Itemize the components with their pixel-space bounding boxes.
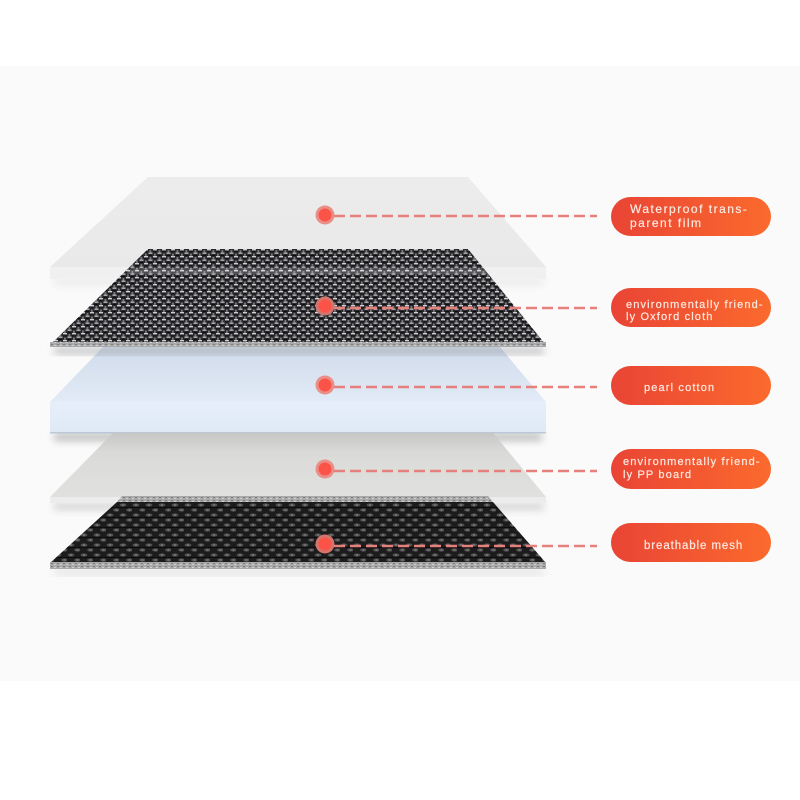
- label: Oxford cloth: [611, 288, 771, 327]
- label: breathable mesh: [611, 523, 771, 562]
- label: pearl cotton: [611, 366, 771, 405]
- background band: [0, 66, 800, 681]
- label: Oxford cloth: environmentally friend-: [626, 299, 764, 311]
- layer: breathable mesh: [50, 496, 546, 575]
- label: PP board: environmentally friend-: [623, 456, 761, 468]
- connector: breathable mesh: [316, 534, 597, 554]
- label: PP board: ly PP board: [623, 469, 692, 481]
- label: waterproof transparent film: Waterproof trans-: [630, 202, 748, 216]
- connector: waterproof film: [316, 206, 597, 224]
- label: breathable mesh: breathable mesh: [644, 540, 743, 552]
- layer: environmentally friendly Oxford cloth: [50, 249, 546, 354]
- label: waterproof transparent film: [611, 197, 771, 236]
- layer: pearl cotton: [50, 347, 546, 441]
- layer: waterproof transparent film: [50, 177, 546, 285]
- label: waterproof transparent film: parent film: [630, 216, 703, 230]
- connector: pearl cotton: [316, 376, 597, 394]
- label: Oxford cloth: ly Oxford cloth: [626, 311, 714, 323]
- label: PP board: [611, 449, 771, 489]
- connector: PP board: [316, 460, 597, 478]
- label: pearl cotton: pearl cotton: [644, 382, 715, 394]
- layer: environmentally friendly PP board: [50, 433, 546, 510]
- connector: Oxford cloth: [316, 296, 597, 316]
